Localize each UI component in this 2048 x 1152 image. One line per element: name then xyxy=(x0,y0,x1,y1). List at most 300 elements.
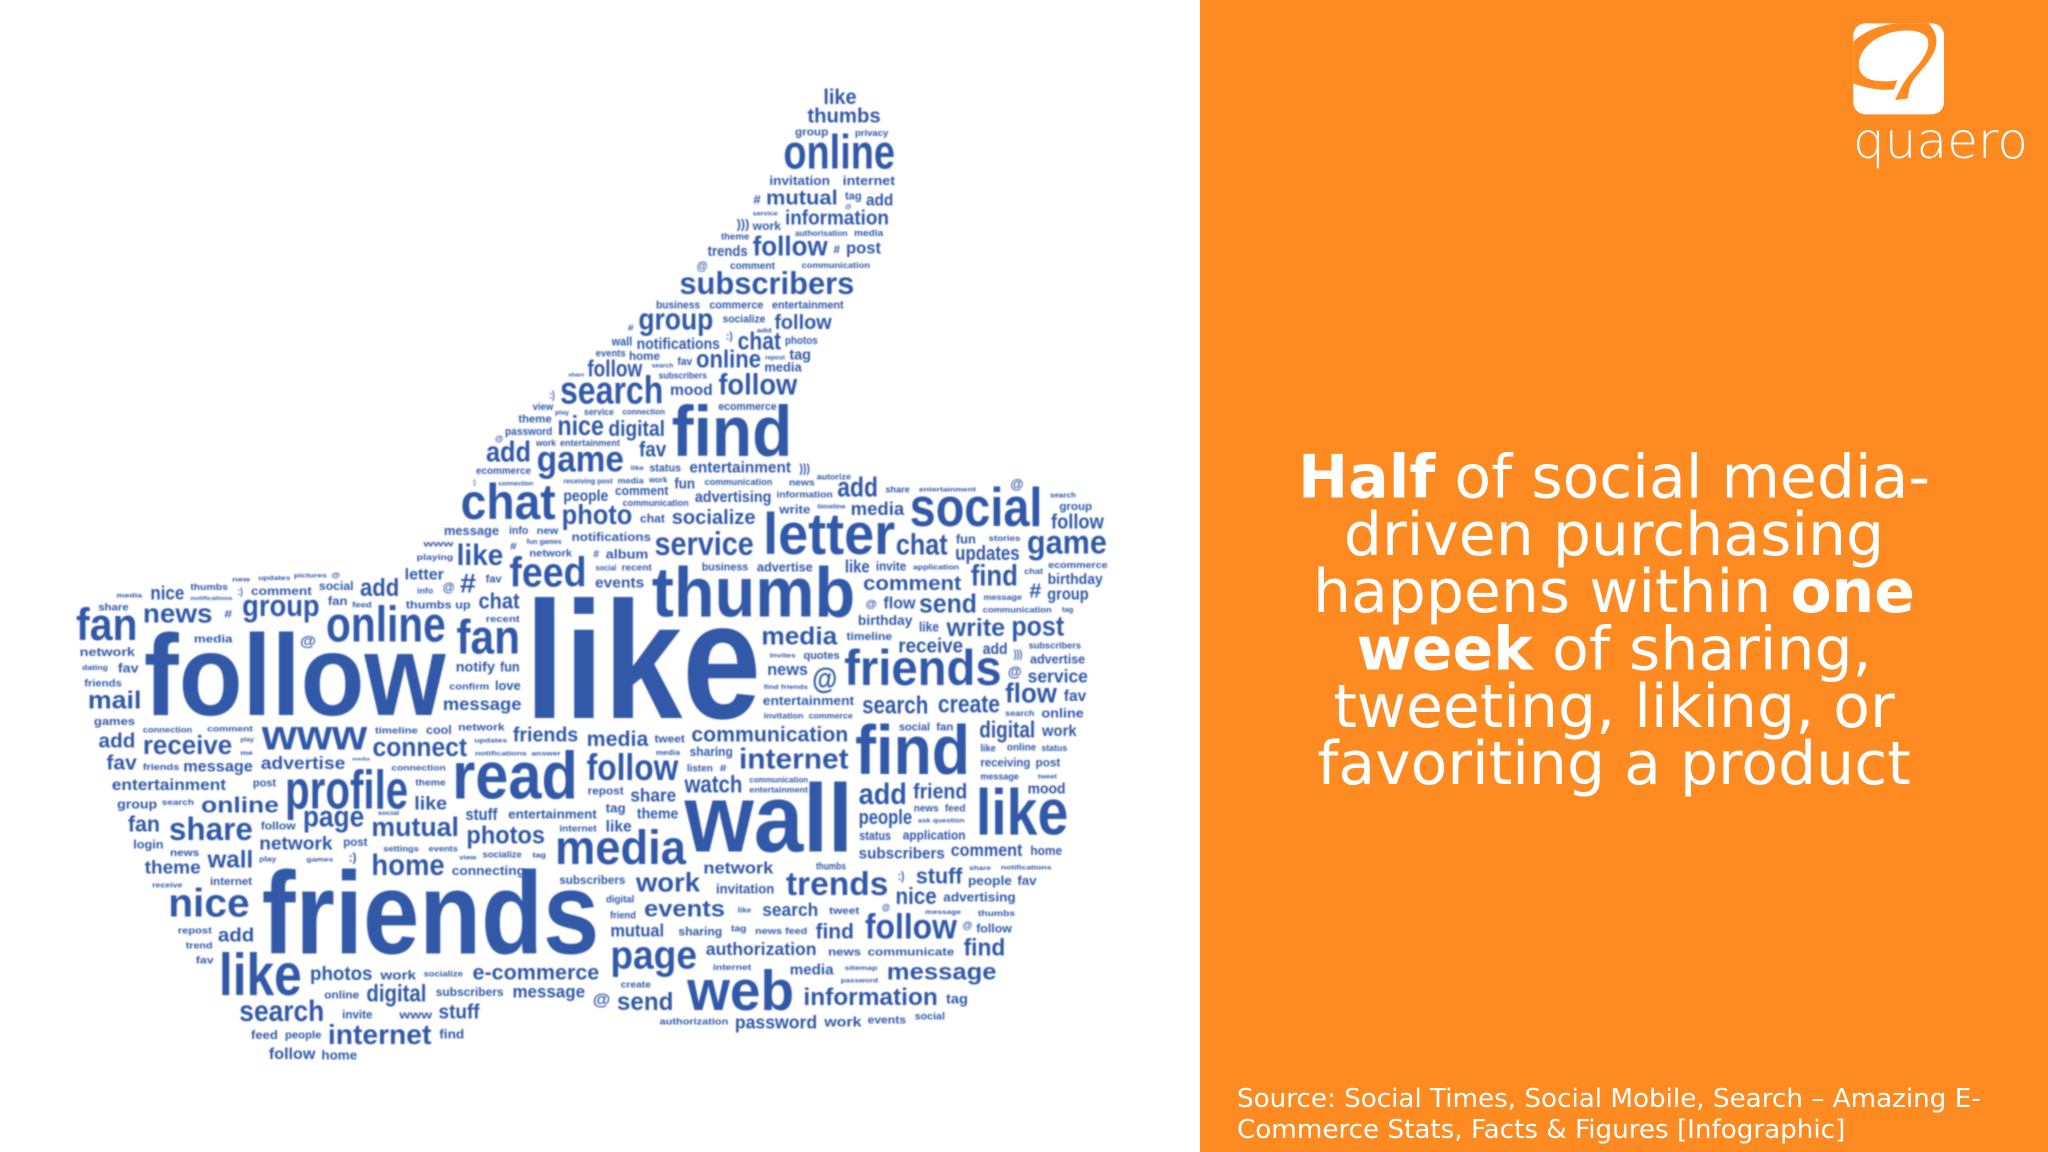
word cloud: left fist: games xyxy=(306,857,333,864)
word cloud: right hand: tweet xyxy=(654,734,685,746)
word cloud: upper thumb: ))) xyxy=(799,462,810,476)
word cloud: right hand: status xyxy=(1041,743,1067,754)
word cloud: left fist: answer xyxy=(531,751,561,757)
word cloud: left fist: info xyxy=(417,586,434,595)
word cloud: left fist: post xyxy=(343,835,367,849)
word cloud: centre upper: fav xyxy=(486,573,502,585)
word cloud: left fist: love xyxy=(495,678,521,693)
word cloud: upper thumb: find xyxy=(672,392,792,472)
word cloud: centre upper xyxy=(417,474,695,599)
word cloud: centre upper: recent xyxy=(622,563,652,573)
word cloud: left fist: notify xyxy=(456,660,495,676)
word cloud: centre upper: chat xyxy=(640,512,665,526)
word cloud: upper thumb: add xyxy=(757,327,772,334)
word cloud: lower right: tag xyxy=(731,924,746,934)
word cloud: upper thumb: share xyxy=(568,373,584,379)
word cloud: right hand: advertise xyxy=(757,560,813,575)
word cloud: upper thumb: commerce xyxy=(709,300,763,312)
word cloud: right hand: information xyxy=(777,489,833,500)
word cloud: right hand: write xyxy=(946,614,1005,642)
word cloud: upper thumb: photos xyxy=(785,335,818,347)
word cloud: lower right: news xyxy=(828,946,861,959)
word cloud: left fist: subscribers xyxy=(436,985,504,999)
word cloud: right hand: add xyxy=(983,641,1008,658)
word cloud: right hand: friend xyxy=(913,779,967,803)
word cloud: left fist: www xyxy=(261,712,367,759)
word cloud: left fist: repost xyxy=(178,926,213,936)
word cloud: left fist: friends xyxy=(262,848,599,978)
word cloud: lower right: media xyxy=(790,962,834,978)
word cloud: right hand: group xyxy=(1047,585,1089,603)
word cloud: right hand: comment xyxy=(863,572,961,595)
word cloud: upper thumb: # xyxy=(628,323,634,333)
word cloud: left fist: photos xyxy=(466,820,545,849)
word cloud: left fist: social xyxy=(378,810,399,817)
word cloud: left fist: friends xyxy=(84,679,122,690)
word cloud: right hand: # xyxy=(1029,581,1041,602)
word cloud: right hand: news xyxy=(914,804,939,815)
word cloud: upper thumb: follow xyxy=(718,368,797,401)
word cloud: upper thumb: theme xyxy=(721,231,749,241)
word cloud: lower right: follow xyxy=(976,922,1012,935)
word cloud: lower right: information xyxy=(803,983,938,1010)
word cloud: right hand: entertainment xyxy=(749,785,808,794)
word cloud: upper thumb: comment xyxy=(730,261,776,272)
word cloud: upper thumb: :) xyxy=(726,330,733,342)
word cloud: right hand: share xyxy=(630,786,676,807)
word cloud: right hand: birthday xyxy=(858,613,912,629)
word cloud: right hand: application xyxy=(913,562,959,571)
word cloud: centre upper: media xyxy=(618,475,644,485)
word cloud: lower right: sitemap xyxy=(845,964,878,971)
word cloud: right hand: social xyxy=(899,722,930,734)
word cloud: left fist: :) xyxy=(237,587,243,598)
word cloud: right hand: listen xyxy=(687,764,713,775)
word cloud: lower right: password xyxy=(841,977,878,984)
word cloud: left fist: network xyxy=(80,645,135,659)
word cloud: left fist: internet xyxy=(210,876,252,888)
word cloud: lower right: people xyxy=(968,873,1012,888)
word cloud: upper thumb: authorisation xyxy=(795,229,848,238)
word cloud: right hand: letter xyxy=(763,502,895,567)
word cloud: centre upper: work xyxy=(648,476,668,485)
word cloud: lower right: create xyxy=(621,980,651,990)
word cloud: right hand: flow xyxy=(883,594,916,612)
word cloud: centre upper: :) xyxy=(472,477,476,487)
word cloud: left fist: internet xyxy=(328,1020,432,1051)
word cloud: upper thumb: @ xyxy=(495,435,504,444)
word cloud: right hand: sharing xyxy=(690,744,733,759)
word cloud: lower right: find xyxy=(815,920,854,943)
word cloud: upper thumb: service xyxy=(584,407,614,417)
word cloud: left fist: play xyxy=(259,855,277,864)
word cloud: right hand: @ xyxy=(1008,664,1022,681)
word cloud: left fist: add xyxy=(360,573,399,602)
word cloud: left fist: add xyxy=(99,730,135,752)
word cloud: upper thumb: notifications xyxy=(637,336,720,353)
word cloud: upper thumb: game xyxy=(537,438,624,480)
word cloud: left fist: connection xyxy=(391,763,446,773)
word cloud: lower right: @ xyxy=(962,920,972,931)
word cloud: left fist: nice xyxy=(168,880,250,925)
word cloud: centre upper: info xyxy=(509,525,528,537)
word cloud: right hand: tag xyxy=(1062,605,1074,614)
word cloud: centre upper: fun games xyxy=(527,537,562,546)
word cloud: left fist: online xyxy=(201,792,279,817)
word cloud: left fist: find xyxy=(439,1026,464,1041)
word cloud: upper thumb: chat xyxy=(738,328,781,355)
word cloud: right hand: digital xyxy=(979,717,1035,743)
word cloud: right hand: like xyxy=(919,620,939,636)
word cloud: left fist: @ xyxy=(331,571,340,579)
word cloud: right hand: entertainment xyxy=(919,487,977,494)
word cloud: right hand: fan xyxy=(936,722,953,734)
word cloud: left fist: comment xyxy=(251,584,312,598)
source note: Commerce Stats, Facts & Figures [Infographic] xyxy=(1237,1115,1845,1145)
word cloud: left fist: @ xyxy=(300,633,316,650)
word cloud: upper thumb: tag xyxy=(845,190,862,202)
word cloud: left fist: invite xyxy=(342,1008,373,1021)
word cloud: left fist: updates xyxy=(474,738,507,745)
word cloud: centre upper: new xyxy=(537,526,559,537)
word cloud: left fist: profile xyxy=(285,759,408,821)
word cloud: right hand: business xyxy=(702,562,748,574)
word cloud: right hand: news xyxy=(789,478,815,489)
source note: Source: Social Times, Social Mobile, Search – Amazing E- xyxy=(1237,1084,1981,1114)
word cloud: lower right: search xyxy=(762,900,818,920)
word cloud: left fist: stuff xyxy=(439,1000,480,1023)
word cloud: right hand: flow xyxy=(1005,678,1058,710)
word cloud: left fist: page xyxy=(303,801,364,833)
word cloud: left fist: notifications xyxy=(190,596,232,602)
word cloud: left fist: connection xyxy=(143,725,192,735)
word cloud: centre lower: events xyxy=(644,896,725,922)
word cloud: right hand: chat xyxy=(1024,566,1043,576)
word cloud: right hand: subscribers xyxy=(859,845,945,862)
logo wordmark: quaero xyxy=(1853,112,2028,170)
word cloud: right hand: communication xyxy=(704,477,773,488)
word cloud: right hand: watch xyxy=(684,772,742,799)
word cloud: upper thumb: ))) xyxy=(737,216,749,231)
word cloud: upper thumb xyxy=(476,84,896,481)
word cloud: right hand: online xyxy=(1041,706,1084,720)
word cloud: upper thumb: view xyxy=(533,402,554,413)
word cloud: left fist: add xyxy=(218,925,254,946)
word cloud: right hand: updates xyxy=(955,543,1020,565)
word cloud: right hand: add xyxy=(859,778,907,811)
word cloud: right hand: application xyxy=(903,828,966,842)
word cloud: left fist: fun xyxy=(500,660,520,676)
panel: word cloud thumbs-up xyxy=(76,84,1108,1063)
word cloud: upper thumb: entertainment xyxy=(689,460,791,477)
word cloud: right hand: @ xyxy=(1010,477,1024,492)
word cloud: left fist: theme xyxy=(145,857,201,878)
word cloud: left fist: network xyxy=(458,723,505,734)
word cloud: right hand: chat xyxy=(896,529,948,561)
word cloud: centre lower: invitation xyxy=(716,880,774,896)
word cloud: upper thumb: group xyxy=(638,302,713,336)
word cloud: right hand xyxy=(630,472,1108,872)
word cloud: right hand: media xyxy=(656,748,681,757)
word cloud: upper thumb: play xyxy=(555,409,569,416)
word cloud: centre upper: communication xyxy=(623,498,689,508)
word cloud: left fist: mail xyxy=(88,687,141,714)
word cloud: lower right: follow xyxy=(865,907,958,946)
word cloud: centre upper: connection xyxy=(498,481,533,488)
word cloud: centre lower: media xyxy=(587,727,648,751)
source note xyxy=(1237,1084,1981,1145)
word cloud: lower right: share xyxy=(969,865,991,871)
word cloud: centre upper: social xyxy=(596,564,616,573)
word cloud: lower right: web xyxy=(686,959,794,1022)
word cloud: upper thumb: add xyxy=(866,191,893,210)
word cloud: upper thumb: work xyxy=(752,219,781,233)
word cloud: right hand: work xyxy=(1041,723,1077,740)
word cloud: left fist: wall xyxy=(207,846,253,873)
word cloud: upper thumb: events xyxy=(596,349,626,360)
word cloud: centre upper: events xyxy=(595,575,644,591)
word cloud: centre upper: @ xyxy=(443,581,455,595)
word cloud: centre upper: message xyxy=(444,523,499,538)
word cloud: right hand: wall xyxy=(684,764,853,872)
word cloud: right hand: internet xyxy=(739,744,849,775)
word cloud: left fist: message xyxy=(443,694,521,714)
word cloud: centre lower: internet xyxy=(559,823,597,833)
word cloud: upper thumb: online xyxy=(696,346,761,374)
word cloud: lower right: password xyxy=(735,1012,817,1033)
word cloud: centre lower: network xyxy=(703,858,774,877)
word cloud: left fist: follow xyxy=(144,612,447,740)
word cloud: upper thumb: home xyxy=(629,349,660,363)
word cloud: centre upper: like xyxy=(457,539,503,572)
word cloud: right hand: invites xyxy=(770,653,796,660)
word cloud: left fist: like xyxy=(414,793,447,814)
word cloud: upper thumb: @ xyxy=(845,203,852,210)
word cloud: left fist: stuff xyxy=(465,805,498,824)
word cloud: right hand: send xyxy=(919,589,977,619)
word cloud: right hand: @ xyxy=(812,662,837,695)
word cloud: left fist: feed xyxy=(352,600,372,610)
word cloud: upper thumb: follow xyxy=(774,311,833,334)
word cloud: left fist: like xyxy=(219,942,302,1009)
word cloud: right hand: communication xyxy=(983,605,1052,615)
word cloud: right hand: people xyxy=(859,807,912,829)
word cloud: left fist: events xyxy=(429,844,458,854)
headline: favoriting a product xyxy=(1317,729,1911,799)
word cloud: lower right: send xyxy=(617,989,673,1016)
word cloud: right hand: media xyxy=(761,623,838,650)
panel: orange side panel xyxy=(1200,0,2048,1152)
word cloud: upper thumb: connection xyxy=(622,407,665,416)
word cloud: upper thumb: socialize xyxy=(723,313,765,325)
word cloud: left fist: receive xyxy=(143,731,232,760)
word cloud: left fist: fan xyxy=(76,599,137,650)
word cloud: lower right: tag xyxy=(946,992,968,1007)
word cloud: left fist: advertise xyxy=(261,754,345,773)
word cloud: upper thumb: subscribers xyxy=(659,371,707,381)
word cloud: right hand: like xyxy=(976,776,1068,849)
word cloud: upper thumb: ecommerce xyxy=(476,466,531,477)
word cloud: right hand: communication xyxy=(691,722,848,747)
word cloud: right hand: post xyxy=(1011,611,1065,643)
word cloud: left fist: updates xyxy=(258,575,291,582)
word cloud: right hand: subscribers xyxy=(1029,640,1081,651)
word cloud: upper thumb: media xyxy=(764,360,802,375)
word cloud: upper thumb: password xyxy=(505,426,552,438)
word cloud: left fist: work xyxy=(379,967,416,982)
word cloud: centre upper: # xyxy=(593,548,599,560)
word cloud: upper thumb: post xyxy=(846,238,881,257)
word cloud: right hand: timeline xyxy=(847,631,892,643)
word cloud: right hand: ))) xyxy=(1014,649,1023,661)
word cloud: centre upper: photo xyxy=(562,499,632,530)
word cloud: left fist: tag xyxy=(532,851,547,860)
word cloud: left fist: confirm xyxy=(449,682,489,692)
word cloud: right hand: message xyxy=(983,592,1022,602)
word cloud: left fist: feed xyxy=(251,1028,278,1042)
word cloud: left fist: settings xyxy=(383,844,419,854)
word cloud: left fist: fan xyxy=(128,811,160,836)
word cloud: right hand: commerce xyxy=(809,710,853,720)
word cloud: left fist: notifications xyxy=(475,751,527,757)
word cloud: lower right: advertising xyxy=(943,890,1016,905)
word cloud: lower right: communicate xyxy=(868,946,955,959)
word cloud: left fist: theme xyxy=(415,778,446,789)
word cloud: upper thumb: information xyxy=(785,208,889,230)
word cloud: right hand: theme xyxy=(637,806,678,822)
word cloud: left fist: follow xyxy=(269,1045,315,1063)
word cloud: central word like: like xyxy=(525,568,761,754)
word cloud: centre lower: thumbs xyxy=(816,861,846,872)
word cloud: left fist: games xyxy=(94,716,135,728)
word cloud: left fist: dating xyxy=(82,663,108,672)
word cloud: right hand: quotes xyxy=(803,650,840,662)
word cloud: centre upper: people xyxy=(563,488,608,505)
word cloud: left fist: login xyxy=(133,838,164,851)
word cloud: lower right: social xyxy=(915,1011,945,1022)
word cloud: lower right: trends xyxy=(786,865,888,902)
word cloud: upper thumb: mood xyxy=(670,382,713,399)
word cloud: upper thumb: invitation xyxy=(769,173,830,188)
word cloud: lower right: stuff xyxy=(916,864,963,888)
word cloud: right hand: home xyxy=(1030,843,1062,858)
word cloud: left fist: socialize xyxy=(424,969,463,979)
word cloud: lower right: fav xyxy=(1017,873,1037,888)
word cloud: left fist: home xyxy=(321,1047,357,1062)
word cloud: centre upper: comment xyxy=(615,484,669,498)
word cloud: lower right: mutual xyxy=(610,922,664,941)
word cloud: right hand: advertising xyxy=(695,488,771,506)
word cloud: right hand: add xyxy=(837,472,878,503)
word cloud: lower right: page xyxy=(610,932,697,977)
word cloud: left fist: fan xyxy=(328,594,347,608)
headline: happens within one xyxy=(1313,557,1915,627)
word cloud: centre upper: # xyxy=(510,541,517,552)
word cloud: left fist: follow xyxy=(261,820,297,832)
word cloud: left fist: trend xyxy=(186,941,213,951)
word cloud: left fist: read xyxy=(452,738,578,813)
word cloud: right hand: social xyxy=(910,476,1042,538)
word cloud: centre lower: tag xyxy=(606,801,626,816)
word cloud: upper thumb: repost xyxy=(765,354,786,361)
word cloud: left fist: share xyxy=(169,811,253,848)
word cloud: left fist: post xyxy=(253,778,276,790)
word cloud: left fist: media xyxy=(116,593,142,600)
word cloud: upper thumb: # xyxy=(833,242,840,256)
word cloud: right hand: feed xyxy=(945,804,966,815)
word cloud: upper thumb: ecommerce xyxy=(718,401,777,413)
word cloud: centre upper: www xyxy=(422,539,454,549)
word cloud: lower right: events xyxy=(868,1014,906,1026)
word cloud: left fist: online xyxy=(326,596,446,652)
word cloud: lower right: news feed xyxy=(755,926,807,936)
word cloud: upper thumb: media xyxy=(854,228,884,238)
word cloud: centre lower: follow xyxy=(587,746,679,788)
word cloud: left fist: friends xyxy=(513,723,578,746)
word cloud: left fist: share xyxy=(98,603,129,614)
word cloud: centre upper: receiving post xyxy=(563,476,613,485)
headline: Half of social media- xyxy=(1298,443,1930,513)
word cloud: upper thumb: @ xyxy=(697,259,708,273)
word cloud: upper thumb: entertainment xyxy=(560,438,620,448)
word cloud: lower right: @ xyxy=(593,990,610,1009)
word cloud: upper thumb: service xyxy=(753,210,778,217)
word cloud: left fist: play xyxy=(240,737,255,744)
word cloud: left fist: entertainment xyxy=(112,777,227,794)
word cloud: right hand: invitation xyxy=(764,710,803,720)
word cloud: left fist: socialize xyxy=(482,850,522,861)
word cloud: centre lower: repost xyxy=(588,785,624,797)
word cloud: upper thumb: search xyxy=(560,369,663,412)
word cloud: left fist: group xyxy=(242,588,320,623)
word cloud: lower right: notifications xyxy=(1001,863,1051,871)
word cloud: right hand: like xyxy=(980,744,996,755)
word cloud: right hand: post xyxy=(1036,756,1060,770)
word cloud: lower right: :) xyxy=(898,870,904,883)
word cloud: upper thumb: privacy xyxy=(855,128,888,138)
word cloud: right hand: find friends xyxy=(764,684,808,691)
word cloud: lower right: authorization xyxy=(660,1016,728,1027)
word cloud: upper thumb: tag xyxy=(789,347,811,363)
word cloud: left fist: chat xyxy=(479,588,520,613)
word cloud: right hand: receive xyxy=(898,635,963,658)
word cloud: upper thumb: nice xyxy=(557,410,604,441)
word cloud: upper thumb: follow xyxy=(753,231,828,262)
word cloud: lower right: @ xyxy=(882,903,890,913)
word cloud: left fist: media xyxy=(194,634,234,646)
word cloud: centre upper: notifications xyxy=(572,530,651,544)
word cloud: right hand: game xyxy=(1027,524,1107,561)
word cloud: left fist: photos xyxy=(310,964,372,985)
word cloud: right hand: socialize xyxy=(672,506,756,529)
word cloud: lower right: message xyxy=(887,958,996,984)
word cloud: upper thumb: fav xyxy=(677,356,692,368)
icon: speech bubble mark xyxy=(1853,23,1944,114)
word cloud: lower right: internet xyxy=(713,963,752,972)
word cloud: left fist: thumbs xyxy=(190,582,228,593)
word cloud: right hand: service xyxy=(654,526,754,563)
word cloud: upper thumb: communication xyxy=(802,260,870,270)
word cloud: left fist: www xyxy=(398,1010,433,1021)
word cloud: right hand: media xyxy=(851,499,905,520)
word cloud: right hand: service xyxy=(1028,667,1088,688)
word cloud: right hand: search xyxy=(862,692,928,719)
word cloud: upper thumb: thumbs xyxy=(807,106,881,128)
word cloud: left fist: news xyxy=(143,598,212,628)
word cloud: centre lower: digital xyxy=(606,895,635,906)
word cloud: lower right: message xyxy=(925,908,961,915)
word cloud: upper thumb: group xyxy=(795,127,829,139)
